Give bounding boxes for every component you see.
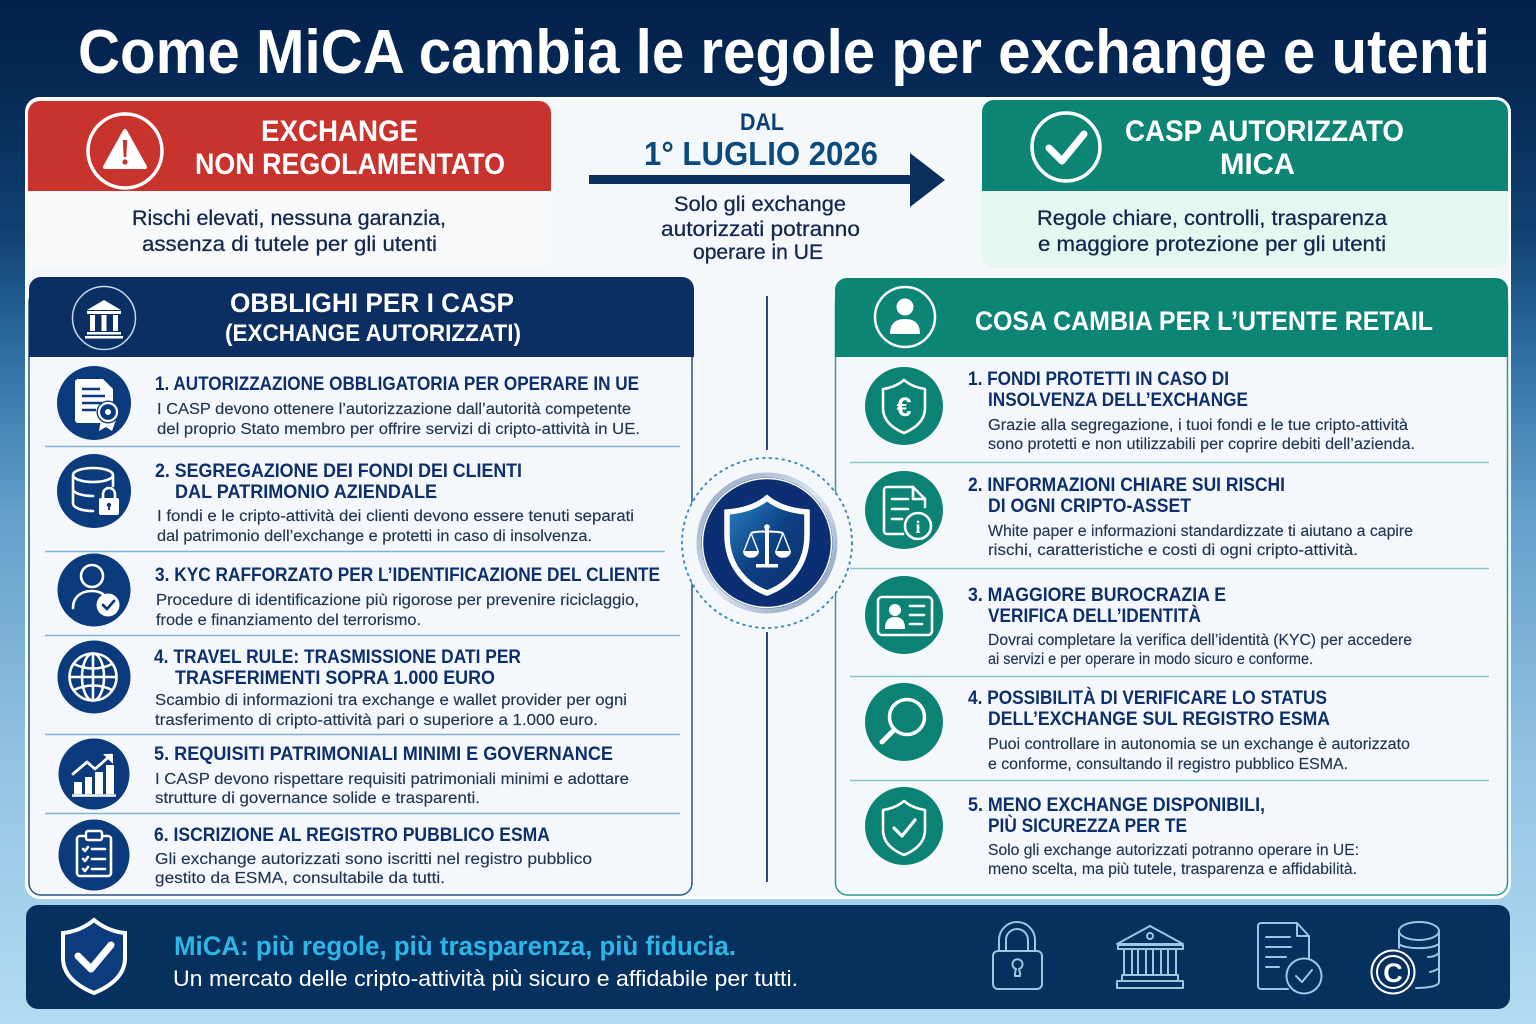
item 5 bbox=[58, 738, 629, 810]
text: sono protetti e non utilizzabili per coprire debiti dell’azienda. bbox=[988, 436, 1415, 453]
icon: checklist bbox=[58, 820, 130, 890]
text: White paper e informazioni standardizzate ti aiutano a capire bbox=[988, 523, 1413, 540]
icon: magnifier bbox=[865, 683, 943, 761]
item 4 bbox=[58, 640, 627, 729]
text: 3. KYC RAFFORZATO PER L’IDENTIFICAZIONE DEL CLIENTE bbox=[155, 565, 660, 586]
text: TRASFERIMENTI SOPRA 1.000 EURO bbox=[175, 668, 495, 689]
text: 1. AUTORIZZAZIONE OBBLIGATORIA PER OPERARE IN UE bbox=[155, 374, 639, 395]
icon: database lock bbox=[57, 454, 131, 528]
text: frode e finanziamento del terrorismo. bbox=[156, 612, 421, 629]
item 1 bbox=[865, 367, 1415, 453]
text bbox=[155, 461, 634, 545]
text: 1. FONDI PROTETTI IN CASO DI bbox=[968, 369, 1229, 390]
icon: document info: i bbox=[915, 517, 921, 537]
text: 2. SEGREGAZIONE DEI FONDI DEI CLIENTI bbox=[155, 461, 522, 482]
footer text: MiCA: più regole, più trasparenza, più fiducia. bbox=[174, 931, 736, 961]
item 2 bbox=[865, 471, 1413, 559]
icon: ID card bbox=[865, 576, 943, 654]
icon: certificate document bbox=[57, 366, 131, 440]
text: Grazie alla segregazione, i tuoi fondi e le tue cripto-attività bbox=[988, 417, 1408, 434]
panel: date and arrow bbox=[589, 109, 945, 264]
footer text: Un mercato delle cripto-attività più sicuro e affidabile per tutti. bbox=[173, 966, 798, 991]
item 4 bbox=[865, 683, 1410, 773]
text: DI OGNI CRIPTO-ASSET bbox=[988, 496, 1191, 517]
footer bar bbox=[26, 905, 1510, 1009]
heading: authorised CASP bbox=[1125, 115, 1404, 181]
text: 2. INFORMAZIONI CHIARE SUI RISCHI bbox=[968, 475, 1285, 496]
icon: approved document bbox=[1258, 923, 1322, 994]
text bbox=[968, 369, 1415, 453]
heading: unregulated exchange: EXCHANGE bbox=[261, 115, 418, 148]
icon: euro shield bbox=[865, 367, 943, 445]
central badge: shield with scales bbox=[682, 458, 852, 628]
text: dal patrimonio dell’exchange e protetti in caso di insolvenza. bbox=[157, 528, 592, 545]
text: del proprio Stato membro per offrire servizi di cripto-attività in UE. bbox=[157, 421, 640, 438]
heading: unregulated exchange: NON REGOLAMENTATO bbox=[195, 148, 505, 181]
text: PIÙ SICUREZZA PER TE bbox=[988, 815, 1187, 837]
text: clear rules: e maggiore protezione per gli utenti bbox=[1038, 233, 1386, 256]
text: risks bbox=[132, 207, 446, 256]
icon: user verified bbox=[58, 554, 130, 626]
text: clear rules: Regole chiare, controlli, trasparenza bbox=[1037, 207, 1387, 230]
text: only authorised: autorizzati potranno bbox=[661, 218, 860, 241]
text: Puoi controllare in autonomia se un exchange è autorizzato bbox=[988, 736, 1410, 753]
text: trasferimento di cripto-attività pari o superiore a 1.000 euro. bbox=[155, 712, 598, 729]
text: I CASP devono ottenere l’autorizzazione dall’autorità competente bbox=[157, 401, 631, 418]
icon: document info bbox=[865, 471, 943, 549]
icon: institution bbox=[72, 286, 136, 350]
text: VERIFICA DELL’IDENTITÀ bbox=[988, 605, 1201, 627]
heading: CASP obligations: OBBLIGHI PER I CASP bbox=[230, 288, 514, 318]
date heading bbox=[644, 109, 878, 172]
icon: scales bbox=[743, 524, 791, 568]
arrow bbox=[589, 153, 945, 207]
text: I fondi e le cripto-attività dei clienti devono essere tenuti separati bbox=[157, 508, 634, 525]
text: Procedure di identificazione più rigorose per prevenire riciclaggio, bbox=[156, 592, 639, 609]
icon: warning bbox=[88, 114, 162, 188]
text: risks: assenza di tutele per gli utenti bbox=[142, 233, 437, 256]
text bbox=[968, 585, 1412, 668]
text: Solo gli exchange autorizzati potranno operare in UE: bbox=[988, 842, 1359, 859]
heading: CASP obligations: (EXCHANGE AUTORIZZATI) bbox=[225, 320, 521, 347]
text: Dovrai completare la verifica dell’identità (KYC) per accedere bbox=[988, 632, 1412, 649]
text: INSOLVENZA DELL’EXCHANGE bbox=[988, 390, 1248, 411]
main white panel bbox=[26, 98, 1510, 898]
centre vertical line bbox=[766, 296, 768, 882]
text bbox=[154, 744, 629, 807]
text bbox=[968, 475, 1413, 559]
heading: retail user: COSA CAMBIA PER L’UTENTE RETAIL bbox=[975, 306, 1433, 336]
text: clear rules bbox=[1037, 207, 1387, 256]
text: 4. TRAVEL RULE: TRASMISSIONE DATI PER bbox=[154, 647, 521, 668]
icon: footer shield bbox=[63, 920, 125, 993]
date heading: 1° LUGLIO 2026 bbox=[644, 135, 878, 172]
text: ai servizi e per operare in modo sicuro e conforme. bbox=[988, 651, 1313, 668]
icon: coins bbox=[1372, 922, 1439, 994]
icon: coins: C bbox=[1383, 958, 1403, 988]
heading: CASP obligations bbox=[225, 288, 521, 347]
text: Gli exchange autorizzati sono iscritti nel registro pubblico bbox=[155, 851, 592, 868]
footer text bbox=[173, 931, 798, 991]
icon: user bbox=[875, 287, 935, 347]
text: only authorised: Solo gli exchange bbox=[674, 193, 846, 216]
text: strutture di governance solide e trasparenti. bbox=[155, 790, 480, 807]
text: Scambio di informazioni tra exchange e wallet provider per ogni bbox=[155, 692, 627, 709]
icon: growth chart bbox=[58, 738, 130, 810]
text: 5. MENO EXCHANGE DISPONIBILI, bbox=[968, 795, 1265, 816]
text bbox=[968, 687, 1410, 773]
text: I CASP devono rispettare requisiti patrimoniali minimi e adottare bbox=[155, 771, 629, 788]
panel: authorised CASP bbox=[982, 100, 1508, 268]
text: rischi, caratteristiche e costi di ogni cripto-attività. bbox=[988, 542, 1358, 559]
date heading: DAL bbox=[740, 109, 784, 136]
text: 4. POSSIBILITÀ DI VERIFICARE LO STATUS bbox=[968, 687, 1327, 709]
icon: globe bbox=[58, 640, 130, 714]
icon: check bbox=[1032, 113, 1100, 181]
panel: retail user changes bbox=[835, 278, 1508, 895]
item 3 bbox=[865, 576, 1412, 668]
item 6 bbox=[58, 820, 592, 890]
text: 6. ISCRIZIONE AL REGISTRO PUBBLICO ESMA bbox=[154, 825, 550, 846]
text bbox=[155, 374, 640, 438]
icon: shield check bbox=[865, 787, 943, 865]
panel: unregulated exchange bbox=[28, 101, 551, 268]
text: e conforme, consultando il registro pubblico ESMA. bbox=[988, 756, 1348, 773]
text: risks: Rischi elevati, nessuna garanzia, bbox=[132, 207, 446, 230]
heading: unregulated exchange bbox=[195, 115, 505, 181]
heading: authorised CASP: MICA bbox=[1220, 148, 1295, 181]
text: DAL PATRIMONIO AZIENDALE bbox=[175, 482, 437, 503]
text: only authorised: operare in UE bbox=[693, 241, 823, 264]
text: meno scelta, ma più tutele, trasparenza e affidabilità. bbox=[988, 861, 1357, 878]
item 5 bbox=[865, 787, 1359, 878]
text bbox=[968, 795, 1359, 878]
text: only authorised bbox=[661, 193, 860, 264]
item 3 bbox=[58, 554, 660, 629]
icon: euro shield: € bbox=[896, 392, 912, 422]
heading: authorised CASP: CASP AUTORIZZATO bbox=[1125, 115, 1404, 148]
text bbox=[155, 565, 660, 629]
text: DELL’EXCHANGE SUL REGISTRO ESMA bbox=[988, 709, 1330, 730]
text bbox=[154, 647, 627, 729]
text bbox=[154, 825, 592, 887]
item 2 bbox=[57, 454, 634, 545]
text: 3. MAGGIORE BUROCRAZIA E bbox=[968, 585, 1226, 606]
text: gestito da ESMA, consultabile da tutti. bbox=[155, 870, 445, 887]
icon: bank bbox=[1117, 926, 1183, 988]
panel: CASP obligations bbox=[29, 277, 694, 895]
text: 5. REQUISITI PATRIMONIALI MINIMI E GOVERNANCE bbox=[154, 744, 613, 765]
item 1 bbox=[57, 366, 640, 440]
icon: padlock bbox=[993, 922, 1042, 989]
